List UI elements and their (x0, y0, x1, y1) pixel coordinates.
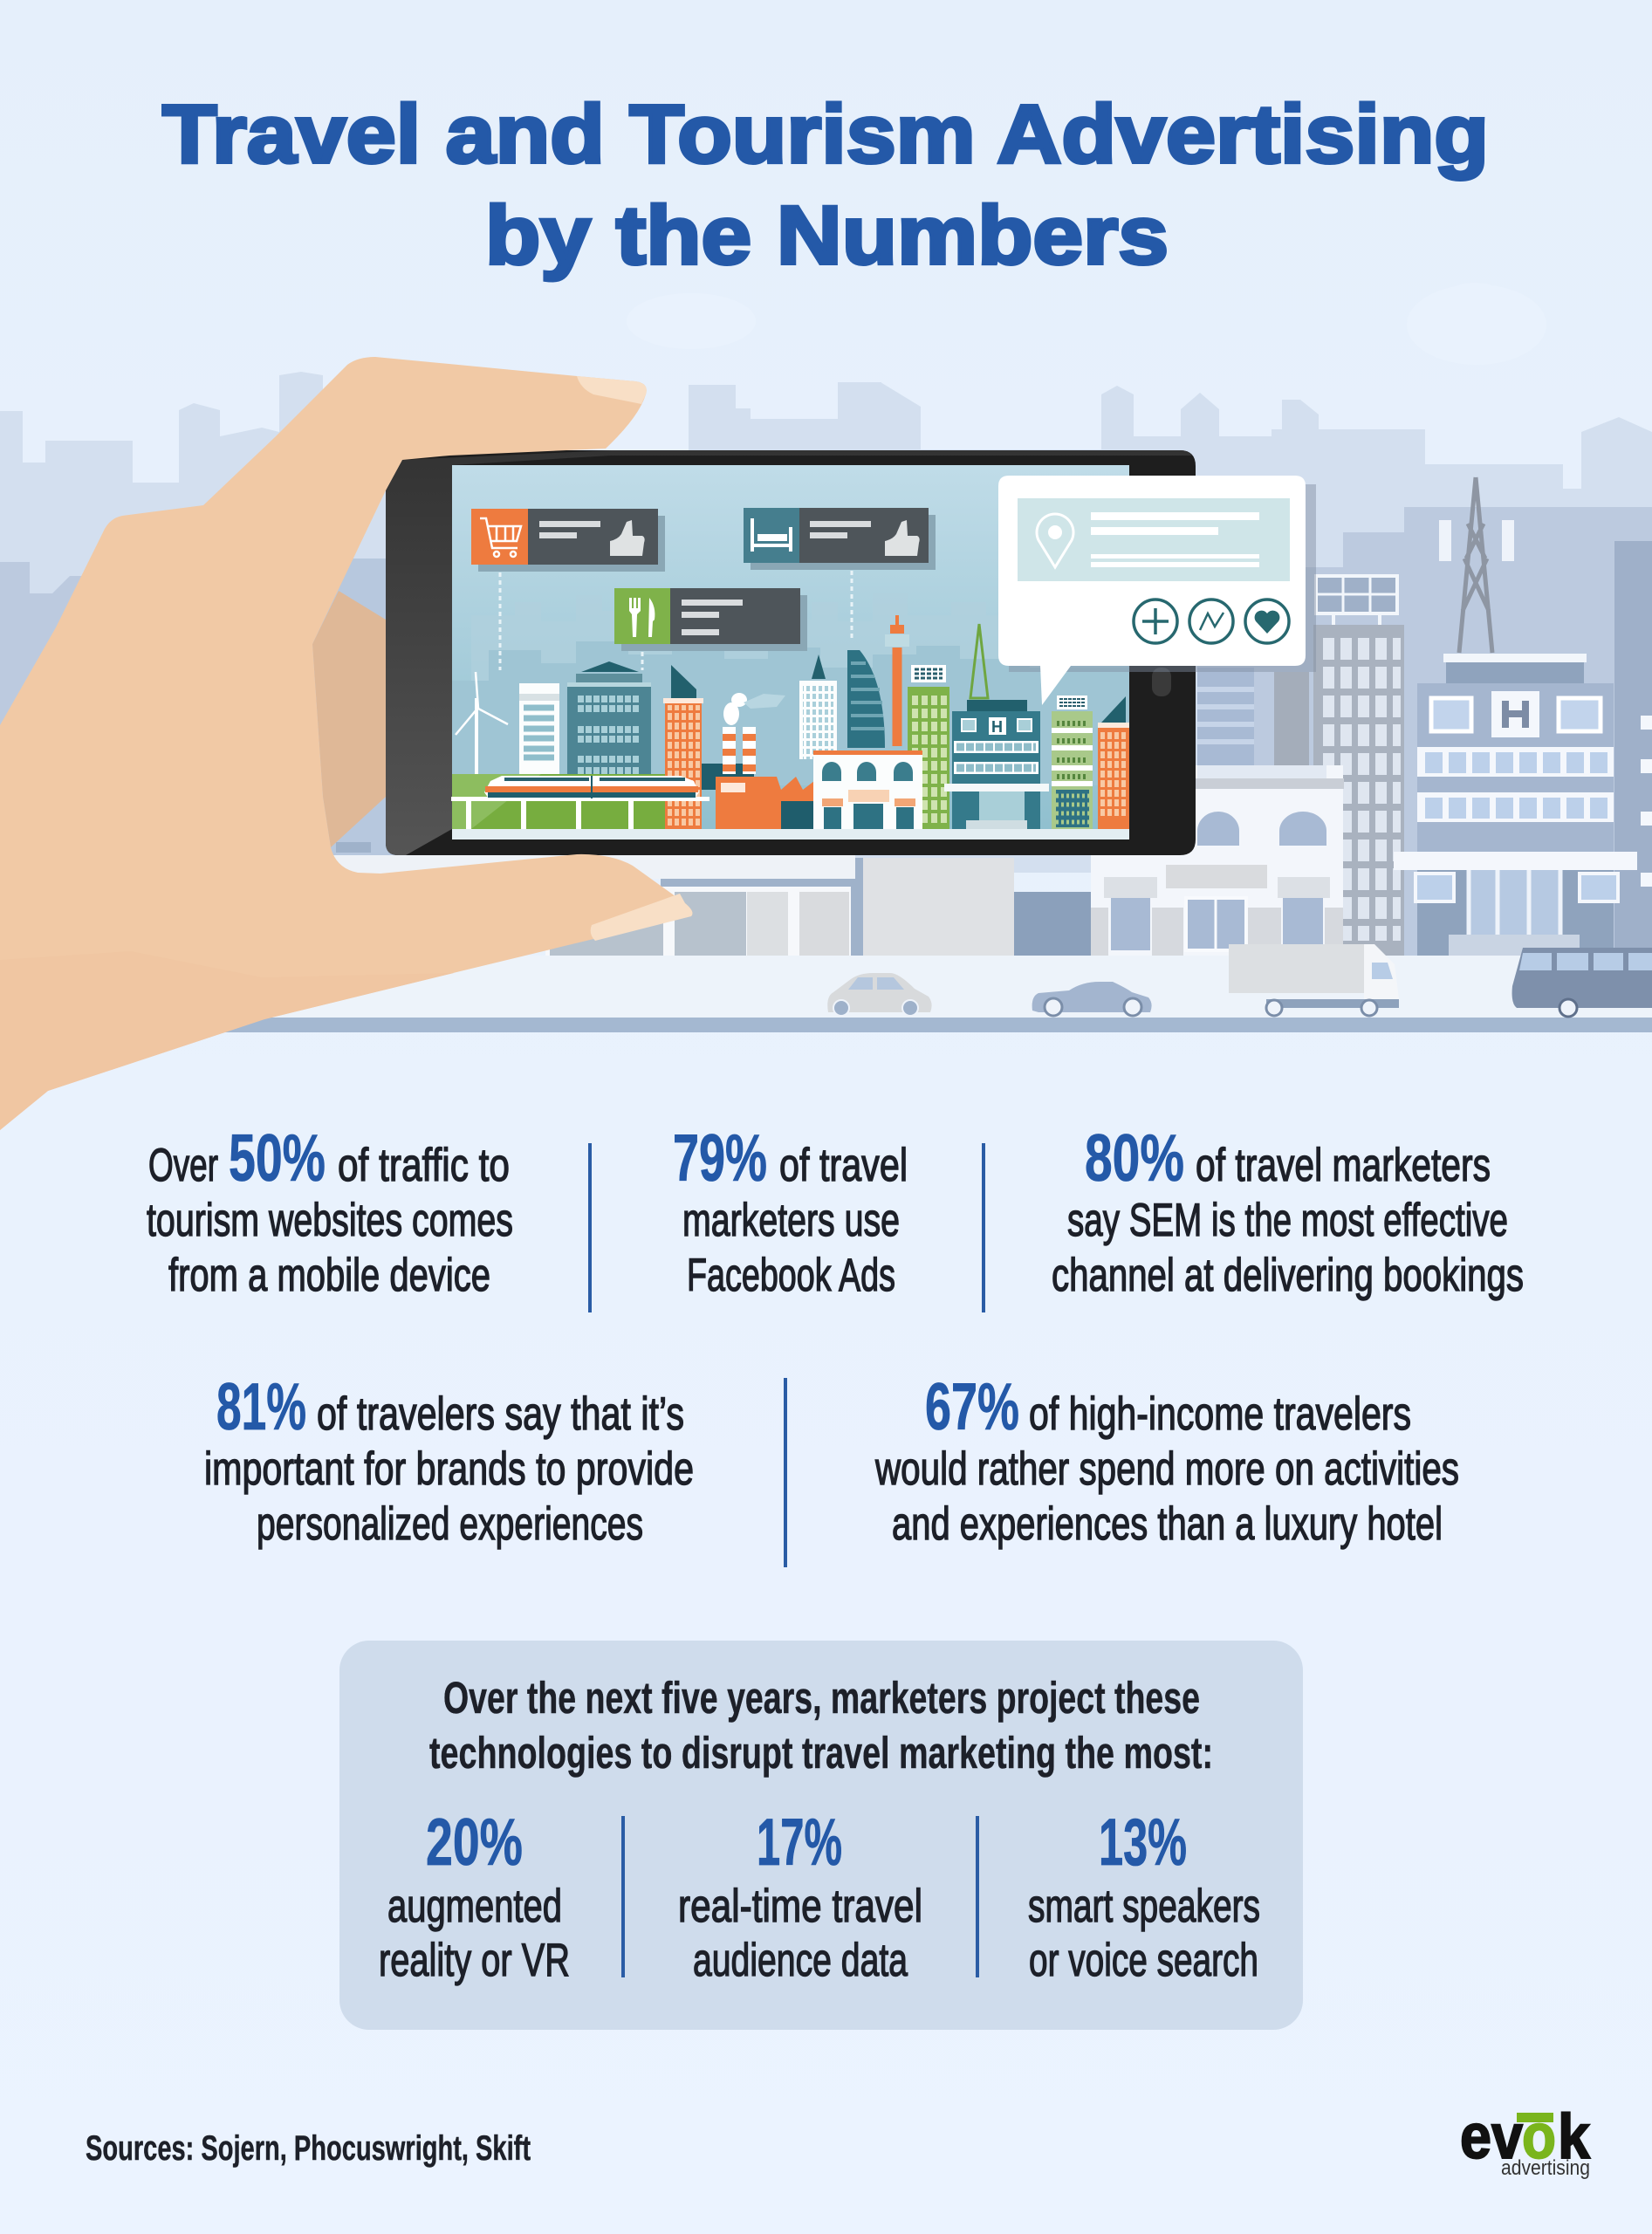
stat: 50% mobile traffic: Over (148, 1140, 218, 1191)
stat: 80% SEM: of travel marketers (1196, 1140, 1491, 1191)
stat: 50% mobile traffic: tourism websites comes (147, 1195, 513, 1246)
stat: 67% high-income travelers: 67% (925, 1370, 1019, 1444)
badge: hotel (744, 508, 936, 570)
warehouse and elevated track (863, 858, 1014, 956)
badge: restaurant (614, 588, 807, 651)
sources: Sources: Sojern, Phocuswright, Skift (86, 2129, 531, 2168)
screen hotel (944, 624, 1049, 829)
factory (702, 693, 814, 829)
bus (1512, 948, 1652, 1017)
stat: 67% high-income travelers: would rather spend more on activities (874, 1443, 1459, 1495)
icon: bed (752, 518, 791, 552)
curved tower (847, 650, 885, 748)
far skyline (0, 372, 1652, 873)
stat: 13% smart speakers (1028, 1806, 1260, 1986)
stat: 81% personalized experiences: personalized experiences (257, 1498, 643, 1550)
icon: fork and knife (629, 598, 655, 637)
stat: 17% real-time data: real-time travel (678, 1881, 922, 1932)
stat: 50% mobile traffic (147, 1121, 513, 1301)
icon: thumbs up (610, 520, 645, 556)
stat: 13% smart speakers: or voice search (1029, 1935, 1258, 1986)
stat: 80% SEM: 80% (1085, 1121, 1184, 1196)
stat: 17% real-time data: 17% (757, 1806, 842, 1880)
stat: 20% AR or VR: reality or VR (379, 1935, 570, 1986)
teal building (567, 661, 651, 774)
stat: 79% Facebook Ads: 79% (673, 1121, 767, 1196)
stat: 67% high-income travelers (874, 1370, 1459, 1550)
stat: 17% real-time data: audience data (693, 1935, 908, 1986)
phone screen (452, 465, 1129, 839)
solar panel (1316, 576, 1397, 613)
phone (386, 450, 1196, 855)
car: blue (1032, 982, 1152, 1016)
home button (1152, 668, 1171, 696)
logo: evok advertising: advertising (1501, 2156, 1590, 2180)
hotel (1417, 683, 1614, 956)
title: Travel and Tourism Advertising (162, 88, 1489, 181)
stat: 13% smart speakers: smart speakers (1028, 1881, 1260, 1932)
icon: heart (1245, 600, 1289, 643)
stat: 17% real-time data (678, 1806, 922, 1986)
needle tower (885, 615, 909, 746)
white building (519, 683, 559, 774)
train (484, 776, 699, 798)
illustration: city skyline background (0, 283, 1652, 1032)
icon: trend (1189, 600, 1233, 643)
screen skyline (471, 593, 1047, 698)
divider (621, 1816, 625, 1977)
orange building right (1098, 696, 1129, 829)
windmill (456, 672, 508, 774)
stat: 79% Facebook Ads: Facebook Ads (687, 1250, 895, 1301)
stat: 79% Facebook Ads (673, 1121, 908, 1301)
stat: 81% personalized experiences (204, 1370, 694, 1550)
stat: 20% AR or VR: augmented (387, 1881, 562, 1932)
green ground and viaduct (452, 774, 665, 829)
divider (976, 1816, 979, 1977)
stat: 50% mobile traffic: 50% (229, 1121, 326, 1196)
panel: disruptive technologies (339, 1641, 1303, 2030)
stat: 79% Facebook Ads: of travel (779, 1140, 908, 1191)
icon: plus (1134, 600, 1177, 643)
car: silver (827, 973, 932, 1016)
title (162, 88, 1489, 282)
icon: cart (480, 518, 521, 557)
white tower (799, 654, 837, 759)
orange tower (663, 665, 703, 829)
striped mid building (1197, 668, 1254, 768)
divider (982, 1143, 985, 1312)
shop (1091, 765, 1343, 956)
stat: 80% SEM (1052, 1121, 1524, 1301)
hand (0, 357, 692, 1130)
stat: 50% mobile traffic: from a mobile device (168, 1250, 490, 1301)
panel heading: technologies to disrupt travel marketing the most: (429, 1728, 1213, 1778)
stat: 79% Facebook Ads: marketers use (682, 1195, 900, 1246)
panel heading: Over the next five years, marketers project these (443, 1673, 1200, 1723)
stat: 67% high-income travelers: and experiences than a luxury hotel (892, 1498, 1443, 1550)
logo: evok advertising (1460, 2102, 1591, 2180)
badge: shopping (471, 509, 665, 572)
map popup callout (998, 476, 1316, 705)
truck (1229, 944, 1399, 1016)
plant building (1052, 696, 1093, 829)
storefront (813, 750, 922, 829)
clouds (627, 283, 1546, 365)
ground (0, 956, 1652, 1018)
stat: 20% AR or VR (379, 1806, 570, 1986)
stat: 81% personalized experiences: important for brands to provide (204, 1443, 694, 1495)
stat: 50% mobile traffic: of traffic to (338, 1140, 510, 1191)
radio mast (1459, 477, 1492, 653)
logo: evok advertising: k (1558, 2102, 1591, 2172)
road (218, 1018, 1652, 1032)
gray tower (1313, 625, 1404, 956)
stat: 20% AR or VR: 20% (426, 1806, 523, 1880)
green building (908, 665, 949, 829)
screen hotel: H (991, 718, 1003, 736)
divider (588, 1143, 592, 1312)
stat: 81% personalized experiences: 81% (216, 1370, 306, 1444)
stat: 13% smart speakers: 13% (1099, 1806, 1187, 1880)
panel heading (429, 1673, 1213, 1778)
icon: map pin (1037, 514, 1073, 567)
phone body (386, 450, 1196, 855)
icon: thumbs up (885, 520, 920, 556)
divider (784, 1378, 787, 1567)
logo: evok advertising: ev (1460, 2102, 1523, 2172)
mid skyline (0, 562, 96, 873)
stat: 67% high-income travelers: of high-income travelers (1029, 1388, 1411, 1440)
dotted connector lines (500, 563, 852, 670)
logo: evok advertising: o (1522, 2102, 1556, 2172)
stat: 81% personalized experiences: of travelers say that it’s (317, 1388, 684, 1440)
title: by the Numbers (485, 189, 1169, 282)
